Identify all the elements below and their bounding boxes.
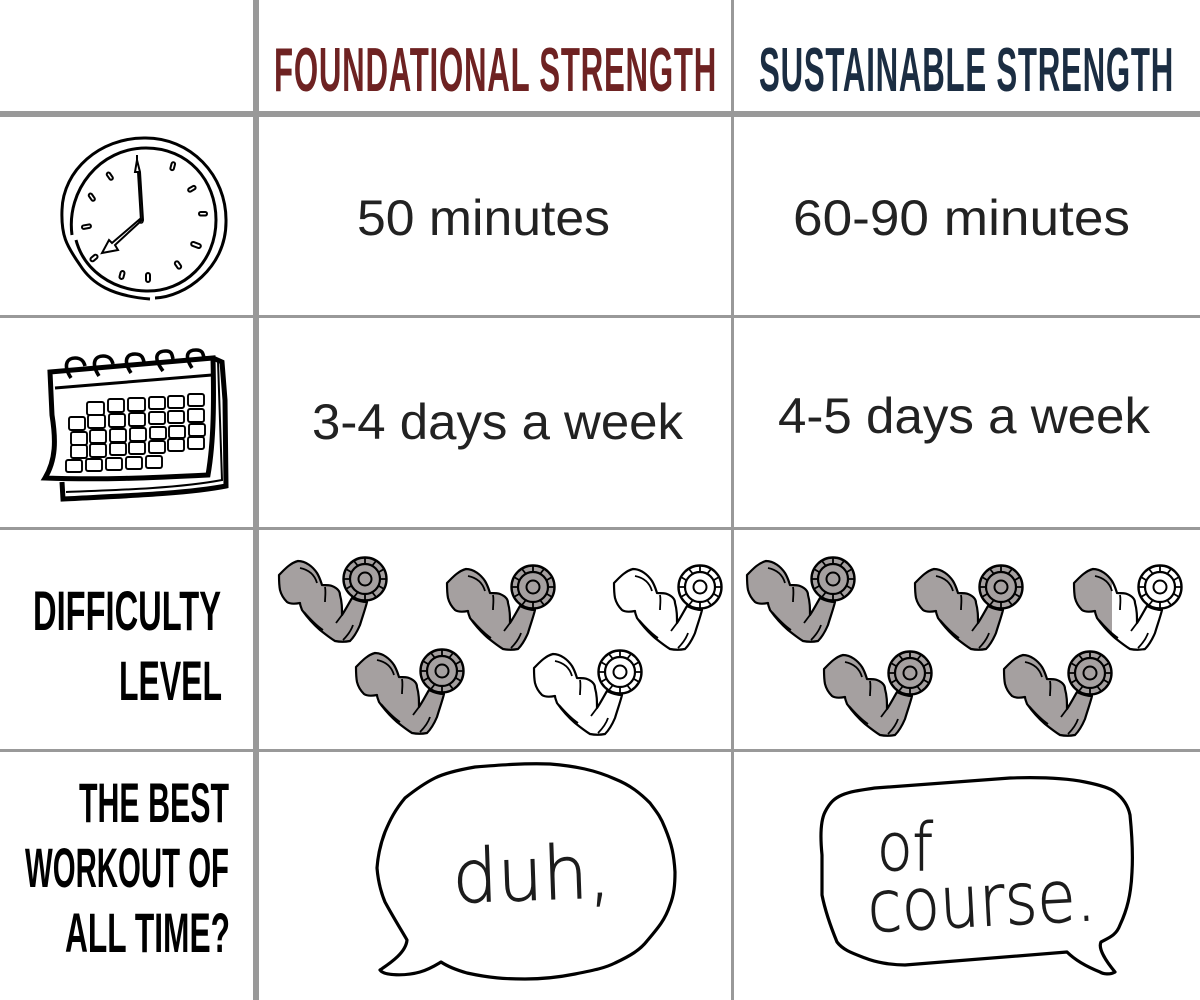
label: difficulty level: DIFFICULTY: [33, 579, 221, 642]
handwritten text: duh,: duh,: [451, 829, 612, 921]
heading: foundational strength: FOUNDATIONAL STRENGTH: [274, 36, 717, 105]
label: difficulty level: [33, 579, 222, 712]
label: the best workout of all time: ALL TIME?: [65, 901, 230, 964]
label: the best workout of all time: [25, 771, 230, 964]
icon: calendar: [45, 350, 226, 499]
rating: foundational difficulty, three of five arms: [279, 558, 722, 735]
label: difficulty level: LEVEL: [119, 649, 222, 712]
icon: clock: [62, 138, 226, 299]
handwritten text: of: of: [877, 809, 934, 886]
speech bubble: duh: [377, 764, 675, 979]
text: 60-90 minutes: 60-90 minutes: [793, 190, 1130, 246]
text: 4-5 days a week: 4-5 days a week: [778, 388, 1151, 444]
text: 3-4 days a week: 3-4 days a week: [312, 394, 684, 450]
text: 50 minutes: 50 minutes: [357, 190, 610, 246]
label: the best workout of all time: WORKOUT OF: [25, 836, 229, 899]
rating: sustainable difficulty, four and a half arms: [747, 558, 1182, 736]
label: the best workout of all time: THE BEST: [79, 771, 229, 834]
speech bubble: of course: [821, 778, 1132, 974]
handwritten text: course.: course.: [865, 853, 1097, 949]
